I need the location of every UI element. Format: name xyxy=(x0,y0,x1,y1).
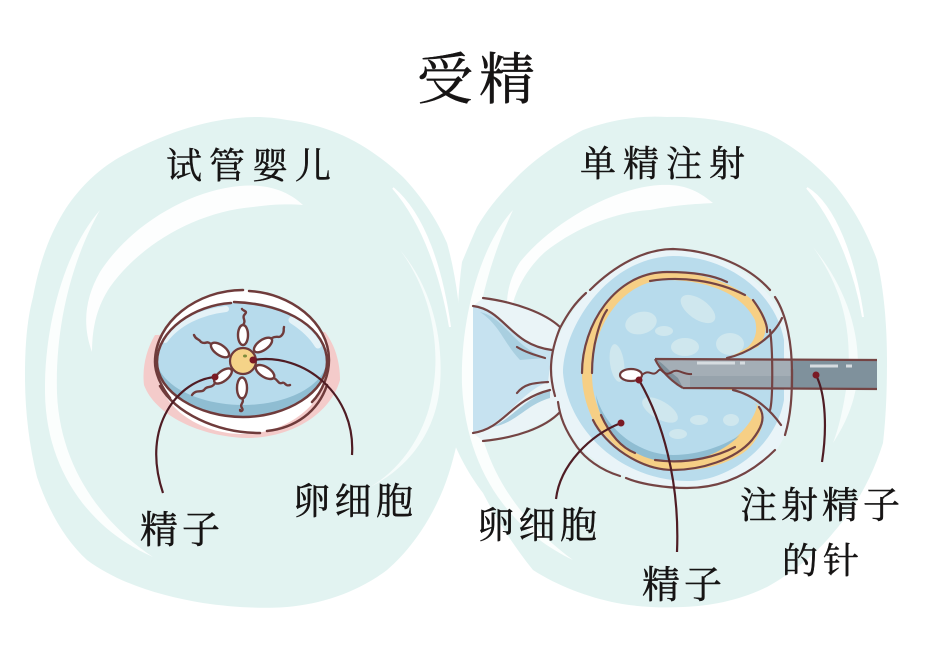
label: egg cell: 卵细胞 xyxy=(293,482,418,523)
dish rims xyxy=(155,290,329,433)
liquid xyxy=(157,302,327,417)
leader line: sperm xyxy=(636,376,677,552)
label: injection needle: 注射精子 xyxy=(740,485,904,527)
label: injection needle xyxy=(740,485,904,581)
perivitelline space xyxy=(563,256,784,481)
panel background blob xyxy=(455,117,887,607)
label: injection needle: 的针 xyxy=(782,541,864,581)
heading: ICSI: 单精注射 xyxy=(580,144,752,184)
liquid highlights xyxy=(165,309,226,340)
petri dish xyxy=(143,290,340,438)
panel: IVF xyxy=(25,117,462,608)
zona fill xyxy=(550,249,792,488)
organelle spots xyxy=(607,289,744,439)
dish base xyxy=(155,290,329,434)
leader line: egg cell xyxy=(250,356,352,455)
liquid shade xyxy=(157,364,326,417)
sperm in cell xyxy=(620,369,692,381)
egg cell xyxy=(230,348,256,374)
pink shadow xyxy=(143,332,340,438)
sperm cells xyxy=(192,309,290,411)
panel background blob xyxy=(25,117,462,608)
injection needle xyxy=(655,359,877,389)
label: sperm: 精子 xyxy=(140,510,224,552)
leader line: egg cell xyxy=(556,420,624,499)
cytoplasm xyxy=(592,280,757,462)
title: 受精 xyxy=(417,50,541,112)
panel: ICSI xyxy=(455,117,904,607)
yellow ring xyxy=(582,272,766,470)
heading: IVF: 试管婴儿 xyxy=(166,146,338,186)
label: sperm: 精子 xyxy=(642,565,726,607)
label: egg cell: 卵细胞 xyxy=(477,506,602,547)
follicle cells xyxy=(473,298,560,441)
egg cell with zona pellucida xyxy=(550,249,792,488)
leader line: needle xyxy=(812,372,825,462)
cytoplasm shade xyxy=(596,395,740,462)
membrane outlines xyxy=(551,249,792,488)
leader line: sperm xyxy=(156,374,218,493)
